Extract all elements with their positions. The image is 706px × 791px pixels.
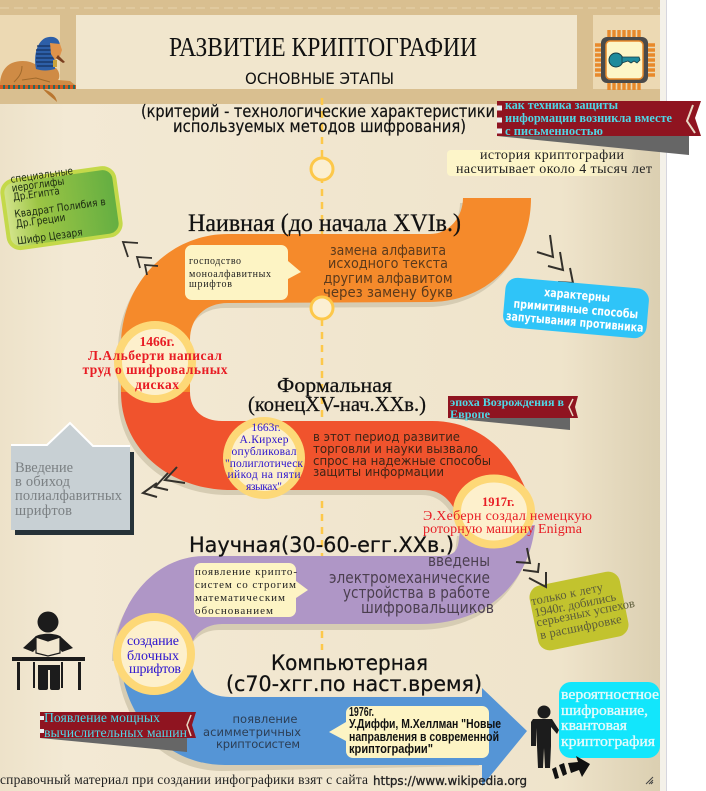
text: electromechanical devices: устройства в работе <box>343 583 490 602</box>
text: asymmetric cryptosystems <box>203 712 301 751</box>
panel: quantum cryptography: квантовая <box>561 718 627 734</box>
heading: naive era: Наивная (до начала XVIв.) <box>188 210 461 237</box>
criteria text: используемых методов шифрования) <box>173 117 466 137</box>
banner: writing origin <box>497 98 701 155</box>
text: electromechanical devices: электромеханические <box>329 568 490 587</box>
subtitle: ОСНОВНЫЕ ЭТАПЫ <box>245 69 394 88</box>
heading: computer era <box>226 651 482 697</box>
heading: scientific era: Научная(30-60-егг.ХХв.) <box>189 533 454 558</box>
panel: olive card 1940 <box>527 567 641 653</box>
text: asymmetric cryptosystems: асимметричных <box>203 725 301 739</box>
banner: writing origin: с письменностью <box>505 124 603 138</box>
criteria text: (критерий - технологические характеристики <box>141 102 495 122</box>
panel: green card of early ciphers: специальные <box>10 165 74 186</box>
node: 1663 Kircher: языках" <box>246 481 282 493</box>
node: block ciphers: шрифтов <box>129 662 181 677</box>
note: 4000 years <box>447 148 652 177</box>
text: trade and science: торговли и науки вызвало <box>313 441 478 456</box>
icon: standing person <box>531 706 559 768</box>
banner: powerful computers: Появление мощных <box>44 711 160 726</box>
node: block ciphers <box>117 617 191 691</box>
footer: source line: https://www.wikipedia.org <box>373 773 527 788</box>
icon: sphinx <box>0 37 76 102</box>
panel: quantum cryptography: шифрование, <box>561 703 648 719</box>
node: 1917 Enigma <box>423 478 592 544</box>
timeline node top <box>311 158 333 180</box>
text: alphabet replacement: исходного текста <box>328 256 448 272</box>
panel: olive card 1940: только к лету <box>530 580 605 608</box>
arrow: dashed black arrow to panel <box>552 756 590 779</box>
callout: mathematical basis: обоснованием <box>195 605 273 617</box>
node: 1466 Alberti <box>82 325 228 399</box>
band: blue era arrow <box>120 650 527 786</box>
panel: polyalphabetic ciphers <box>11 423 134 535</box>
node: 1917 Enigma: 1917г. <box>482 495 514 509</box>
callout: Diffie Hellman <box>329 705 501 758</box>
footer: source line: справочный материал при создании инфографики взят с сайта <box>0 772 368 787</box>
text: alphabet replacement: замена алфавита <box>330 243 446 259</box>
banner: renaissance: Европе <box>450 409 490 421</box>
footer: source line <box>0 772 527 788</box>
band: red era shadow <box>118 397 527 515</box>
panel: green card of early ciphers <box>0 160 122 250</box>
panel: polyalphabetic ciphers: шрифтов <box>15 503 72 519</box>
node: 1466 Alberti: Л.Альберти написал <box>88 348 222 363</box>
callout: Diffie Hellman: направления в современной <box>349 730 499 744</box>
panel: blue card primitive methods: запутывания противника <box>505 309 644 335</box>
panel: polyalphabetic ciphers: в обиход <box>15 474 71 490</box>
callout: Diffie Hellman: У.Диффи, М.Хеллман "Новые <box>349 717 501 731</box>
banner: renaissance <box>448 396 578 430</box>
panel: green card of early ciphers: Шифр Цезаря <box>16 226 83 247</box>
text: electromechanical devices: введены <box>428 551 490 570</box>
callout: monoalphabetic: шрифтов <box>189 279 232 290</box>
panel: olive card 1940: серьезных успехов <box>535 596 636 630</box>
node: 1663 Kircher: 1663г. <box>251 422 281 434</box>
text: trade and science: защиты информации <box>313 464 444 479</box>
panel: green card of early ciphers: Др.Египта <box>12 185 60 204</box>
text: electromechanical devices <box>329 551 494 617</box>
timeline dashed line <box>321 98 323 650</box>
panel: quantum cryptography <box>559 682 660 758</box>
banner: powerful computers <box>40 711 196 752</box>
panel: olive card 1940: в расшифровке <box>539 612 623 642</box>
node: 1917 Enigma: роторную машину Enigma <box>423 522 583 537</box>
arrow: chevrons to green card <box>123 242 158 275</box>
callout: Diffie Hellman: 1976г. <box>349 705 374 719</box>
node: 1663 Kircher: "полиглотическ <box>225 458 303 470</box>
arrow: chevrons to grey panel <box>143 467 185 497</box>
heading: formal era: Формальная <box>277 373 392 397</box>
heading: formal era <box>248 373 426 416</box>
banner: powerful computers: вычислительных машин <box>44 726 187 741</box>
text: electromechanical devices: шифровальщиков <box>361 598 494 617</box>
callout: mathematical basis: систем со строгим <box>195 579 296 591</box>
banner: writing origin: информации возникла вместе <box>505 111 672 125</box>
text: alphabet replacement: другим алфавитом <box>324 271 452 287</box>
criteria text <box>141 102 495 137</box>
callout: mathematical basis <box>194 563 308 617</box>
text: alphabet replacement: через замену букв <box>323 285 453 301</box>
panel: olive card 1940: 1940г. добились <box>533 589 618 620</box>
band: orange era shadow <box>118 203 528 397</box>
timeline node second <box>311 297 333 319</box>
panel: quantum cryptography: вероятностное <box>561 687 659 703</box>
heading: formal era: (конецXV-нач.ХХв.) <box>248 392 426 416</box>
node: 1663 Kircher: опубликовал <box>232 446 297 458</box>
banner: renaissance: эпоха Возрождения в <box>450 397 564 409</box>
callout: Diffie Hellman: криптографии" <box>349 742 433 756</box>
panel: green card of early ciphers: иероглифы <box>11 175 65 195</box>
callout: monoalphabetic: господство <box>189 256 241 267</box>
title: РАЗВИТИЕ КРИПТОГРАФИИ <box>169 32 477 62</box>
callout: mathematical basis: математическим <box>195 592 285 604</box>
icon: resize grip <box>646 777 653 784</box>
banner: writing origin: как техника защиты <box>505 98 618 112</box>
band: purple era shadow <box>112 531 532 661</box>
text: alphabet replacement <box>323 243 453 301</box>
icon: chip with key <box>595 30 655 90</box>
text: asymmetric cryptosystems: криптосистем <box>216 737 300 751</box>
text: asymmetric cryptosystems: появление <box>232 712 298 726</box>
band: purple era <box>115 525 535 655</box>
node: block ciphers: создание <box>127 634 179 649</box>
heading: computer era: (с70-хгг.по наст.время) <box>226 672 482 697</box>
note: 4000 years: история криптографии <box>480 148 624 163</box>
panel: blue card primitive methods <box>502 277 650 339</box>
band: blue era arrow shadow <box>117 656 479 771</box>
panel: green card of early ciphers: Квадрат Полибия в <box>14 196 106 221</box>
node: 1466 Alberti: труд о шифровальных <box>82 362 228 377</box>
callout: mathematical basis: появление крипто- <box>195 566 297 578</box>
node: 1663 Kircher <box>225 421 303 495</box>
panel: green card of early ciphers: Др.Греции <box>15 212 66 231</box>
text: trade and science <box>313 429 491 479</box>
icon: reader at desk <box>12 612 85 690</box>
callout: monoalphabetic: моноалфавитных <box>189 269 271 280</box>
band: orange era <box>121 198 531 392</box>
note: 4000 years: насчитывает около 4 тысяч лет <box>456 162 652 177</box>
heading: computer era: Компьютерная <box>271 651 428 676</box>
panel: quantum cryptography: криптография <box>561 734 655 750</box>
panel: blue card primitive methods: примитивные способы <box>513 297 639 321</box>
panel: polyalphabetic ciphers: полиалфавитных <box>15 488 123 504</box>
callout: monoalphabetic <box>185 245 301 300</box>
node: 1663 Kircher: А.Кирхер <box>240 434 289 446</box>
text: trade and science: спрос на надежные способы <box>313 453 491 468</box>
node: 1917 Enigma: Э.Хеберн создал немецкую <box>423 509 592 524</box>
arrow: chevrons to olive card <box>516 548 546 587</box>
arrow: chevrons to blue card <box>537 235 573 283</box>
band: red era <box>121 392 530 510</box>
node: 1466 Alberti: дисках <box>135 377 179 392</box>
header band <box>0 0 660 104</box>
text: trade and science: в этот период развитие <box>313 429 460 444</box>
node: 1466 Alberti: 1466г. <box>140 334 174 349</box>
node: 1663 Kircher: ийкод на пяти <box>228 469 300 481</box>
node: block ciphers: блочных <box>127 649 179 664</box>
panel: blue card primitive methods: характерны <box>544 285 611 305</box>
panel: polyalphabetic ciphers: Введение <box>15 460 73 476</box>
